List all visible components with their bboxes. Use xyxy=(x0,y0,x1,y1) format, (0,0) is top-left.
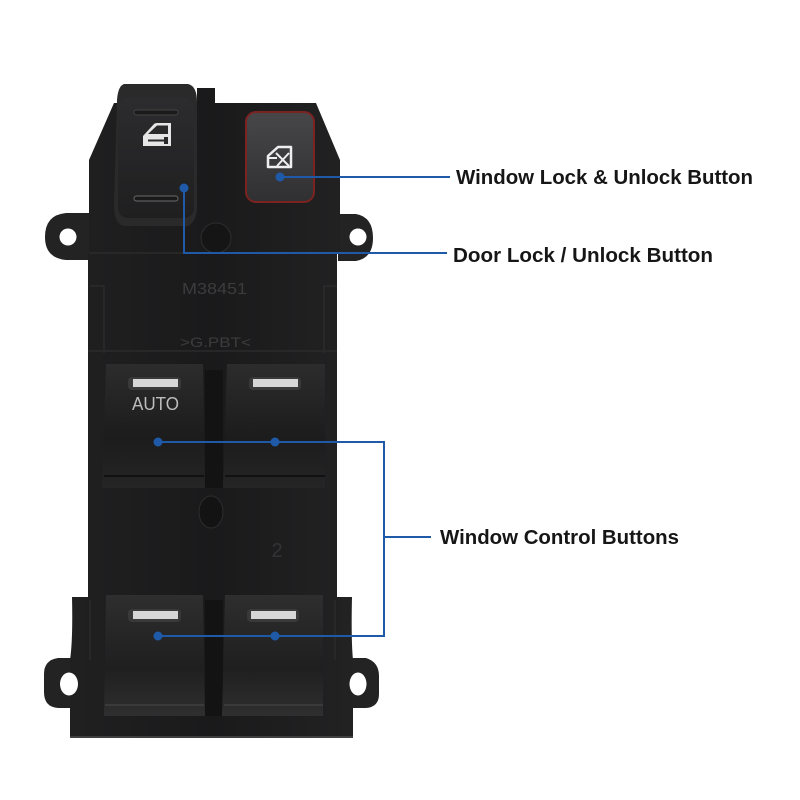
label: window lock: Window Lock & Unlock Button xyxy=(456,167,753,189)
indicator slot xyxy=(249,377,301,390)
centre hole xyxy=(199,496,223,528)
AUTO label: AUTO xyxy=(132,394,179,414)
moulded part number: M38451 xyxy=(182,281,247,298)
upper mounting ears xyxy=(45,213,373,261)
indicator slot xyxy=(128,377,181,390)
icon: window with cross xyxy=(268,147,291,167)
switch unit photo xyxy=(44,84,379,738)
base edge xyxy=(70,736,353,738)
indicator slot xyxy=(247,609,299,622)
window button: rear right xyxy=(222,595,323,716)
label: door lock: Door Lock / Unlock Button xyxy=(453,245,713,267)
callout: window lock button xyxy=(276,167,753,189)
window button: front right xyxy=(223,364,325,488)
moulded material code: >G.PBT< xyxy=(180,334,251,350)
screw recess xyxy=(201,223,231,253)
mounting holes xyxy=(60,228,366,696)
door lock button xyxy=(114,84,197,226)
mould marks on the body xyxy=(88,253,337,660)
lower mounting ears xyxy=(44,658,379,708)
label: window controls: Window Control Buttons xyxy=(440,527,679,549)
window button: front left xyxy=(102,364,205,488)
callout: window control buttons xyxy=(154,438,679,640)
window button: rear left xyxy=(104,595,205,716)
icon: door with key xyxy=(143,123,171,146)
indicator slot xyxy=(128,609,181,622)
window lock button xyxy=(246,112,314,202)
moulded number 2: 2 xyxy=(271,540,283,562)
callout: door lock button xyxy=(180,184,713,267)
housing body xyxy=(70,88,353,738)
channel between buttons xyxy=(205,370,223,716)
